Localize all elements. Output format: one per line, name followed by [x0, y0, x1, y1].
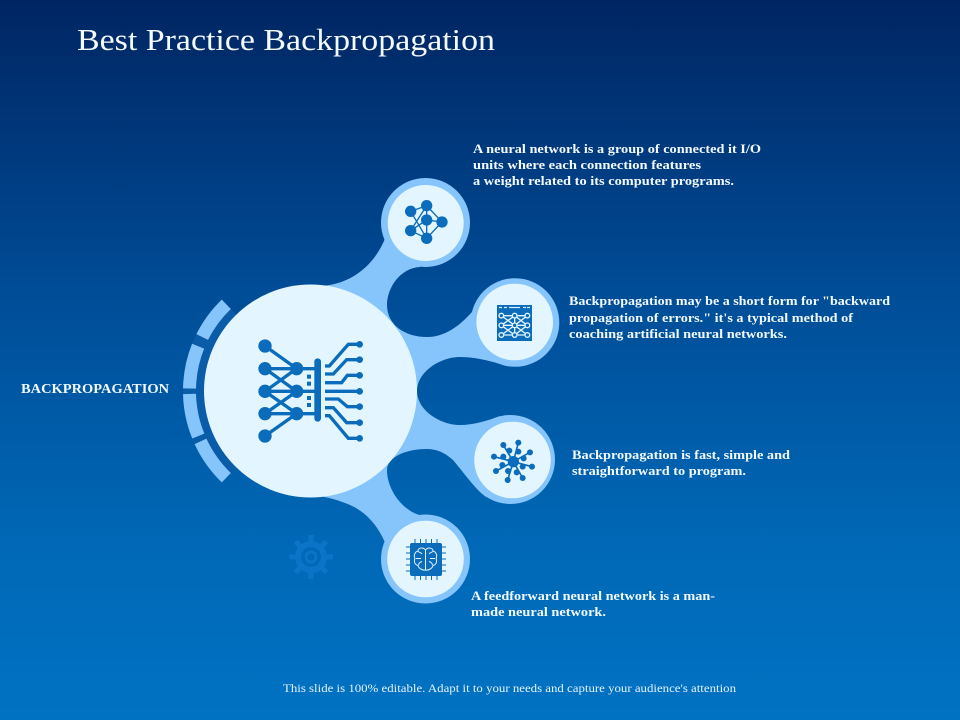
text block 2: coaching artificial neural networks. — [569, 326, 787, 341]
text block 2 — [569, 293, 891, 341]
text block 3: Backpropagation is fast, simple and — [572, 447, 791, 462]
text block 2: Backpropagation may be a short form for "backward — [569, 293, 891, 308]
text block 3 — [572, 447, 791, 478]
text block 1: a weight related to its computer programs. — [473, 173, 734, 188]
label: backpropagation: BACKPROPAGATION — [21, 381, 169, 396]
text block 1 — [473, 141, 761, 188]
footer note: This slide is 100% editable. Adapt it to your needs and capture your audience's attention — [283, 681, 736, 695]
node 3: radial network icon — [466, 415, 555, 504]
text block 4: made neural network. — [471, 604, 606, 619]
text block 4 — [471, 588, 715, 619]
connector shape — [320, 222, 515, 559]
text block 3: straightforward to program. — [572, 463, 746, 478]
text block 1: units where each connection features — [473, 157, 701, 172]
icon: faint gear — [289, 535, 333, 579]
title: Best Practice Backpropagation — [77, 22, 496, 57]
node 4: brain chip icon — [381, 514, 470, 604]
node 2: browser network icon — [471, 278, 559, 367]
node 1: molecule network icon — [381, 178, 470, 267]
text block 1: A neural network is a group of connected it I/O — [473, 141, 761, 156]
text block 4: A feedforward neural network is a man- — [471, 588, 715, 603]
arc decoration — [190, 304, 230, 478]
central circle with network icon — [204, 284, 417, 498]
text block 2: propagation of errors." it's a typical method of — [569, 310, 854, 325]
